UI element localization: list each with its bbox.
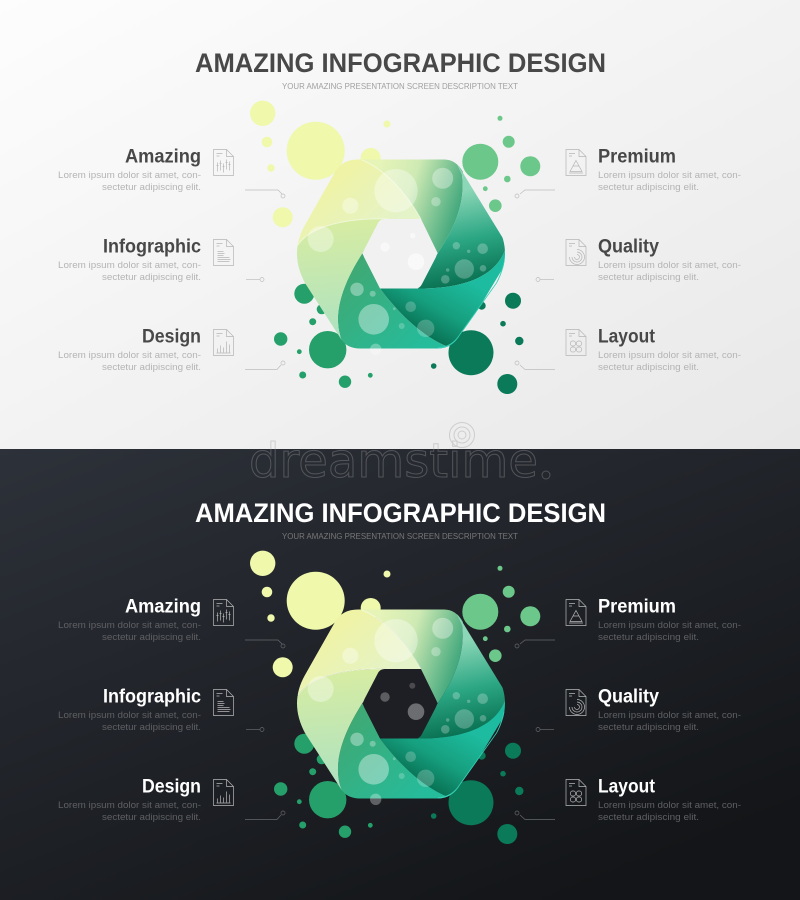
panel: light version — [0, 0, 800, 449]
text block: Amazing: Amazing — [125, 146, 201, 168]
icon: bar chart document — [214, 330, 234, 356]
text block: Quality: Lorem ipsum dolor sit amet, con- — [598, 710, 741, 721]
text block: Design: sectetur adipiscing elit. — [102, 812, 201, 823]
text block: Premium: sectetur adipiscing elit. — [598, 182, 699, 193]
text block: Infographic: sectetur adipiscing elit. — [102, 722, 201, 733]
text block: Infographic: sectetur adipiscing elit. — [102, 272, 201, 283]
text block: Quality: Lorem ipsum dolor sit amet, con- — [598, 260, 741, 271]
icon: concentric arcs document — [566, 690, 586, 716]
text block: Premium: Lorem ipsum dolor sit amet, con- — [598, 170, 741, 181]
subtitle: YOUR AMAZING PRESENTATION SCREEN DESCRIPTION TEXT — [282, 531, 518, 541]
text block: Design: Lorem ipsum dolor sit amet, con- — [58, 350, 201, 361]
icon: bar chart document — [214, 780, 234, 806]
text block: Infographic — [58, 236, 201, 283]
text block: Infographic: Infographic — [103, 686, 201, 708]
icon: candlestick document — [214, 600, 234, 626]
bubbles: mid green — [274, 734, 373, 838]
text block: Premium: Premium — [598, 596, 676, 618]
bubbles: dark green — [431, 743, 524, 844]
text block: Infographic: Lorem ipsum dolor sit amet, con- — [58, 710, 201, 721]
text block: Premium: sectetur adipiscing elit. — [598, 632, 699, 643]
text block: Design — [58, 326, 201, 373]
text block: Layout: Layout — [598, 326, 656, 348]
text block: Layout: Lorem ipsum dolor sit amet, con- — [598, 350, 741, 361]
panel: dark version — [0, 449, 800, 900]
text block: Design: sectetur adipiscing elit. — [102, 362, 201, 373]
bubbles: yellow — [250, 551, 390, 677]
icon: text lines document — [214, 690, 234, 716]
icon: four petals document — [566, 330, 586, 356]
bubbles on ribbon — [308, 618, 488, 805]
bubbles: dark green — [431, 293, 524, 394]
hexagon ribbon — [297, 160, 505, 348]
bubbles: light green — [462, 566, 540, 662]
icon: concentric arcs document — [566, 240, 586, 266]
text block: Design — [58, 776, 201, 823]
text block: Layout: sectetur adipiscing elit. — [598, 812, 699, 823]
watermark: dreamstime — [249, 434, 538, 489]
icon: pyramid document — [566, 600, 586, 626]
text block: Layout: Lorem ipsum dolor sit amet, con- — [598, 800, 741, 811]
text block: Quality — [598, 686, 741, 733]
text block: Quality — [598, 236, 741, 283]
icon: candlestick document — [214, 150, 234, 176]
text block: Layout: Layout — [598, 776, 656, 798]
text block: Layout — [598, 326, 741, 373]
text block: Infographic — [58, 686, 201, 733]
text block: Quality: sectetur adipiscing elit. — [598, 722, 699, 733]
graphic: bubbles and hexagon ribbon — [250, 551, 540, 844]
title: AMAZING INFOGRAPHIC DESIGN — [195, 48, 606, 78]
connector lines — [245, 640, 555, 820]
text block: Amazing: Lorem ipsum dolor sit amet, con- — [58, 620, 201, 631]
icon: four petals document — [566, 780, 586, 806]
text block: Amazing: sectetur adipiscing elit. — [102, 182, 201, 193]
text block: Premium — [598, 596, 741, 643]
text block: Quality: sectetur adipiscing elit. — [598, 272, 699, 283]
bubbles: light green — [462, 116, 540, 212]
text block: Design: Design — [142, 776, 201, 798]
bubbles: mid green — [274, 284, 373, 388]
text block: Amazing: sectetur adipiscing elit. — [102, 632, 201, 643]
bubbles: yellow — [250, 101, 390, 227]
dark background — [0, 449, 800, 900]
bubbles in hole — [380, 233, 424, 270]
text block: Quality: Quality — [598, 686, 659, 708]
text block: Premium: Lorem ipsum dolor sit amet, con- — [598, 620, 741, 631]
center hole — [363, 669, 437, 738]
bubbles in hole — [380, 683, 424, 720]
text block: Premium — [598, 146, 741, 193]
text block: Amazing: Lorem ipsum dolor sit amet, con- — [58, 170, 201, 181]
title: AMAZING INFOGRAPHIC DESIGN — [195, 498, 606, 528]
text block: Infographic: Lorem ipsum dolor sit amet, con- — [58, 260, 201, 271]
center hole — [363, 219, 437, 288]
text block: Quality: Quality — [598, 236, 659, 258]
text block: Design: Design — [142, 326, 201, 348]
subtitle: YOUR AMAZING PRESENTATION SCREEN DESCRIPTION TEXT — [282, 81, 518, 91]
text block: Design: Lorem ipsum dolor sit amet, con- — [58, 800, 201, 811]
text block: Amazing — [58, 146, 201, 193]
icon: pyramid document — [566, 150, 586, 176]
text block: Amazing — [58, 596, 201, 643]
icon: text lines document — [214, 240, 234, 266]
text block: Amazing: Amazing — [125, 596, 201, 618]
text block: Infographic: Infographic — [103, 236, 201, 258]
bubbles on ribbon — [308, 168, 488, 355]
text block: Layout — [598, 776, 741, 823]
text block: Premium: Premium — [598, 146, 676, 168]
text block: Layout: sectetur adipiscing elit. — [598, 362, 699, 373]
hexagon ribbon — [297, 610, 505, 798]
light background — [0, 0, 800, 449]
connector lines — [245, 190, 555, 370]
